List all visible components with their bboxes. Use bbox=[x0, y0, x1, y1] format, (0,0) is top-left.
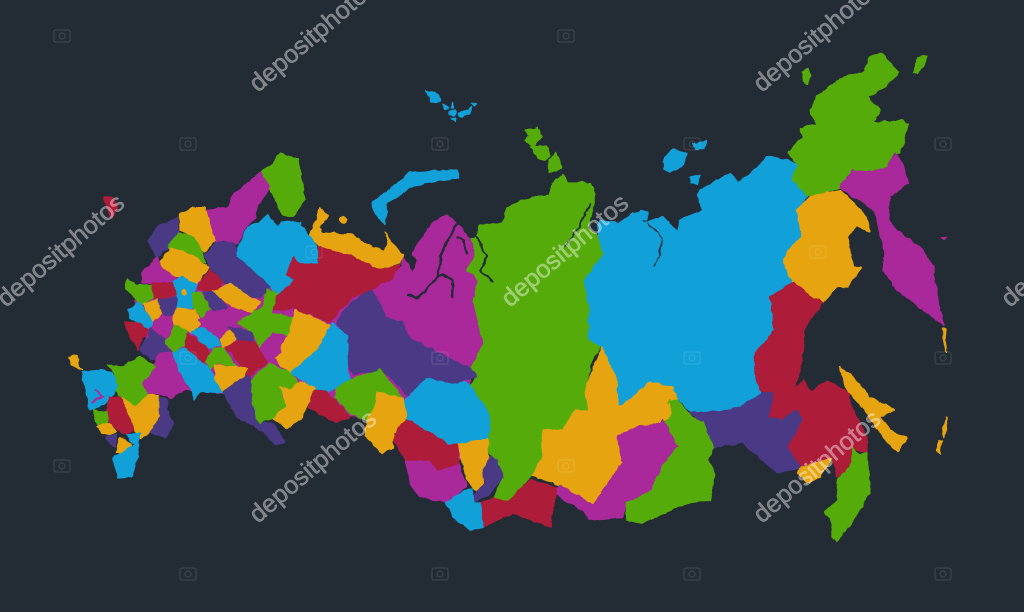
region: Chukotka bbox=[788, 53, 908, 197]
all map regions bbox=[69, 53, 947, 542]
region: Mordovia bbox=[192, 327, 220, 348]
region: Astrakhan bbox=[150, 397, 173, 437]
region: Moscow oblast bbox=[172, 277, 197, 308]
region: Tuva bbox=[480, 480, 557, 527]
watermark: middle centre: depositphotos bbox=[496, 189, 634, 313]
icon: camera bbox=[558, 460, 574, 472]
region: Kurgan bbox=[308, 390, 350, 422]
Kuril islands bbox=[937, 328, 947, 454]
New Siberian islands bbox=[635, 141, 706, 221]
region: Ivanovo bbox=[203, 292, 227, 313]
european russia regions bbox=[69, 153, 407, 478]
region: Krasnodar coast bbox=[82, 370, 117, 410]
region: Vladimir bbox=[193, 292, 210, 317]
region: Kursk bbox=[125, 322, 148, 350]
region: Ingushetia and Chechnya bbox=[116, 437, 132, 452]
region: Karachay-Cherkessia bbox=[93, 410, 108, 427]
region: Arkhangelsk bbox=[237, 215, 317, 295]
Franz Josef Land islands bbox=[425, 90, 476, 121]
river: Yenisei gulf bbox=[477, 237, 492, 282]
region: Tula bbox=[159, 297, 177, 317]
region: Oryol bbox=[153, 315, 175, 338]
icon: camera bbox=[432, 568, 448, 580]
region: Adygea bbox=[92, 390, 103, 403]
region: Tatarstan bbox=[225, 342, 267, 378]
river: Khatanga gulf bbox=[565, 205, 590, 247]
region: Sverdlovsk bbox=[290, 323, 350, 392]
region: Magadan bbox=[783, 190, 870, 302]
region: Karelia bbox=[207, 173, 270, 243]
region: Ryazan bbox=[172, 308, 202, 332]
icon: camera bbox=[54, 30, 70, 42]
icon: camera bbox=[935, 352, 951, 364]
Svalbard islet bbox=[103, 197, 118, 218]
camera watermark icons bbox=[54, 30, 951, 580]
region: Tambov bbox=[185, 333, 210, 363]
region: Bashkortostan bbox=[252, 363, 298, 423]
region: Voronezh and Volgograd bbox=[172, 348, 222, 400]
icon: camera bbox=[306, 246, 322, 258]
region: Nizhny Novgorod bbox=[199, 308, 250, 338]
region: Rostov bbox=[142, 353, 188, 398]
region: Kamchatka bbox=[840, 153, 943, 325]
icon: camera bbox=[935, 138, 951, 150]
region: Kalmykia bbox=[123, 395, 162, 438]
region: Jewish Autonomous bbox=[798, 458, 832, 483]
region: Novgorod bbox=[168, 233, 205, 262]
region: Stavropol bbox=[107, 397, 137, 435]
siberia regions bbox=[337, 90, 715, 530]
region: Amur bbox=[690, 393, 802, 473]
region: Tver bbox=[160, 248, 210, 285]
icon: camera bbox=[432, 138, 448, 150]
region: Buryatia bbox=[553, 420, 677, 520]
region: Bryansk north bbox=[125, 280, 152, 305]
region: Novosibirsk bbox=[393, 417, 458, 470]
region: Chelyabinsk bbox=[273, 382, 315, 429]
icon: camera bbox=[180, 352, 196, 364]
region: Kaluga bbox=[143, 300, 162, 323]
region: Omsk bbox=[365, 392, 407, 453]
icon: camera bbox=[432, 352, 448, 364]
region: Tyumen south bbox=[335, 370, 403, 420]
region: Orenburg bbox=[223, 375, 285, 445]
region: Chuvashia bbox=[220, 330, 237, 348]
region: Altai Republic bbox=[445, 488, 483, 530]
icon: camera bbox=[54, 460, 70, 472]
region: Pskov bbox=[142, 257, 177, 283]
region: Leningrad east bbox=[180, 207, 215, 252]
region: Krasnoyarsk bbox=[465, 175, 603, 502]
region: Kostroma bbox=[213, 283, 260, 312]
watermark: bottom right: depositphotos bbox=[748, 405, 886, 529]
region: Primorye bbox=[825, 448, 870, 542]
region: Belgorod bbox=[140, 328, 172, 360]
region: Krasnodar north bbox=[108, 357, 155, 407]
icon: camera bbox=[180, 568, 196, 580]
region: Kemerovo bbox=[457, 438, 488, 490]
icon: camera bbox=[684, 138, 700, 150]
region: Kirov bbox=[238, 290, 295, 348]
region: Murmansk bbox=[260, 153, 305, 217]
icon: camera bbox=[684, 568, 700, 580]
region: Khabarovsk bbox=[755, 282, 867, 477]
region: Kabardino-Balkaria bbox=[97, 423, 117, 435]
river: Ob bbox=[408, 223, 467, 298]
region: Smolensk bbox=[152, 283, 177, 300]
region: Khanty-Mansi and Yamal bbox=[372, 215, 482, 367]
region: Vologda bbox=[205, 242, 270, 298]
icon: camera bbox=[558, 30, 574, 42]
region: Tomsk bbox=[405, 377, 490, 443]
region: Moscow city bbox=[182, 290, 186, 294]
region: Penza bbox=[206, 348, 237, 370]
river: Lena bbox=[648, 222, 662, 266]
region: Perm bbox=[275, 310, 330, 373]
icon: camera bbox=[810, 246, 826, 258]
watermark: bottom left: depositphotos bbox=[244, 405, 382, 529]
region: Irkutsk bbox=[532, 347, 677, 505]
region: Udmurtia bbox=[258, 333, 283, 363]
icon: camera bbox=[180, 138, 196, 150]
region: Crimea bbox=[69, 355, 82, 370]
icon: camera bbox=[684, 352, 700, 364]
region: Zabaykalsky bbox=[625, 400, 715, 523]
region: Kolguev island bbox=[340, 216, 346, 224]
region: Komi bbox=[272, 247, 400, 322]
region: North Ossetia bbox=[105, 435, 117, 448]
Karaginsky islet bbox=[941, 237, 946, 240]
Novaya Zemlya bbox=[372, 170, 459, 225]
region: Saratov bbox=[215, 365, 247, 392]
region: Sakhalin bbox=[840, 367, 907, 452]
far east regions bbox=[583, 53, 947, 542]
region: Lipetsk bbox=[166, 325, 188, 352]
region: Mari El bbox=[228, 327, 253, 342]
region: Nenets coast bbox=[310, 208, 403, 270]
region: Khakassia bbox=[473, 455, 503, 503]
interior filler under western regions bbox=[135, 250, 470, 460]
Wrangel and Herald islands bbox=[802, 55, 927, 85]
region: Yaroslavl bbox=[197, 270, 223, 292]
region: Chechnya east bbox=[127, 433, 140, 443]
region: Dagestan bbox=[113, 442, 138, 478]
Severnaya Zemlya islands bbox=[525, 128, 562, 172]
region: Leningrad west bbox=[148, 218, 178, 257]
region: Bryansk bbox=[128, 303, 152, 330]
region: Tyumen bbox=[337, 288, 477, 395]
region: Altai Krai bbox=[405, 460, 467, 502]
region: Yakutia bbox=[583, 157, 808, 413]
icon: camera bbox=[935, 568, 951, 580]
